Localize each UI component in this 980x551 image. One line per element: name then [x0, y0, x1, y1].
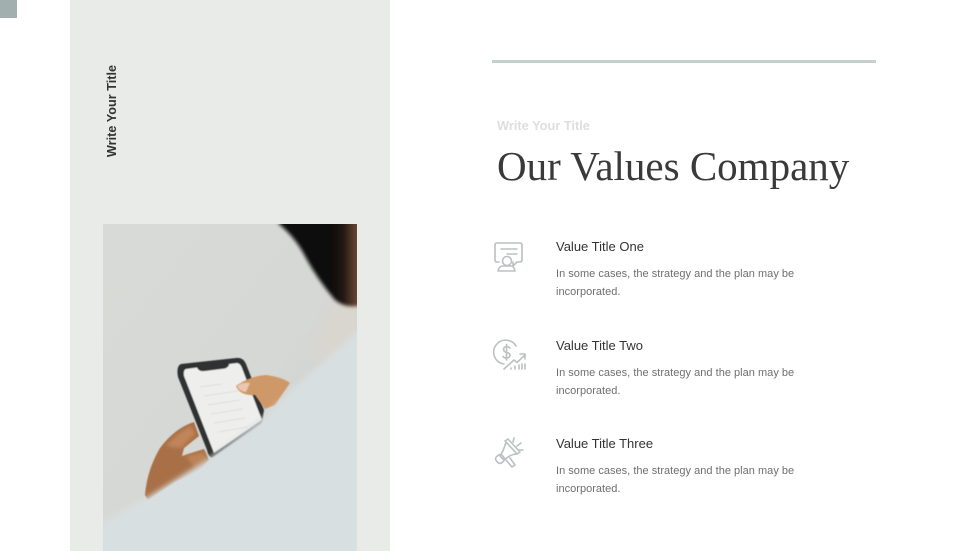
- value description: [556, 367, 794, 396]
- photo: hand holding a smartphone: [103, 224, 357, 551]
- vertical panel title: Write Your Title: [104, 65, 118, 157]
- subtitle: Write Your Title: [497, 118, 590, 133]
- value title: Value Title Three: [556, 436, 653, 451]
- value item two: [493, 338, 794, 396]
- value description: In some cases, the strategy and the plan may be: [556, 465, 794, 477]
- icon: megaphone: [494, 437, 524, 468]
- hair and neck: [279, 218, 372, 372]
- value description: In some cases, the strategy and the plan may be: [556, 268, 794, 280]
- value item one: [494, 239, 794, 298]
- main heading: Our Values Company: [497, 143, 849, 189]
- value item three: [494, 436, 794, 494]
- phone: [177, 358, 264, 458]
- fingers: [145, 422, 209, 500]
- top rule: [492, 60, 876, 63]
- value title: Value Title Two: [556, 338, 643, 353]
- corner accent square: [0, 0, 17, 18]
- icon: presenter speech bubble: [494, 242, 523, 272]
- value description: incorporated.: [556, 384, 620, 396]
- left panel background: [70, 0, 390, 551]
- icon: dollar coin with growth chart: [493, 339, 526, 370]
- value description: [556, 465, 794, 494]
- value description: [556, 268, 794, 298]
- wall: [103, 224, 357, 551]
- value description: incorporated.: [556, 286, 620, 298]
- value title: Value Title One: [556, 239, 644, 254]
- value description: incorporated.: [556, 482, 620, 494]
- sweater: [90, 320, 370, 551]
- value description: In some cases, the strategy and the plan may be: [556, 367, 794, 379]
- thumb: [236, 375, 290, 409]
